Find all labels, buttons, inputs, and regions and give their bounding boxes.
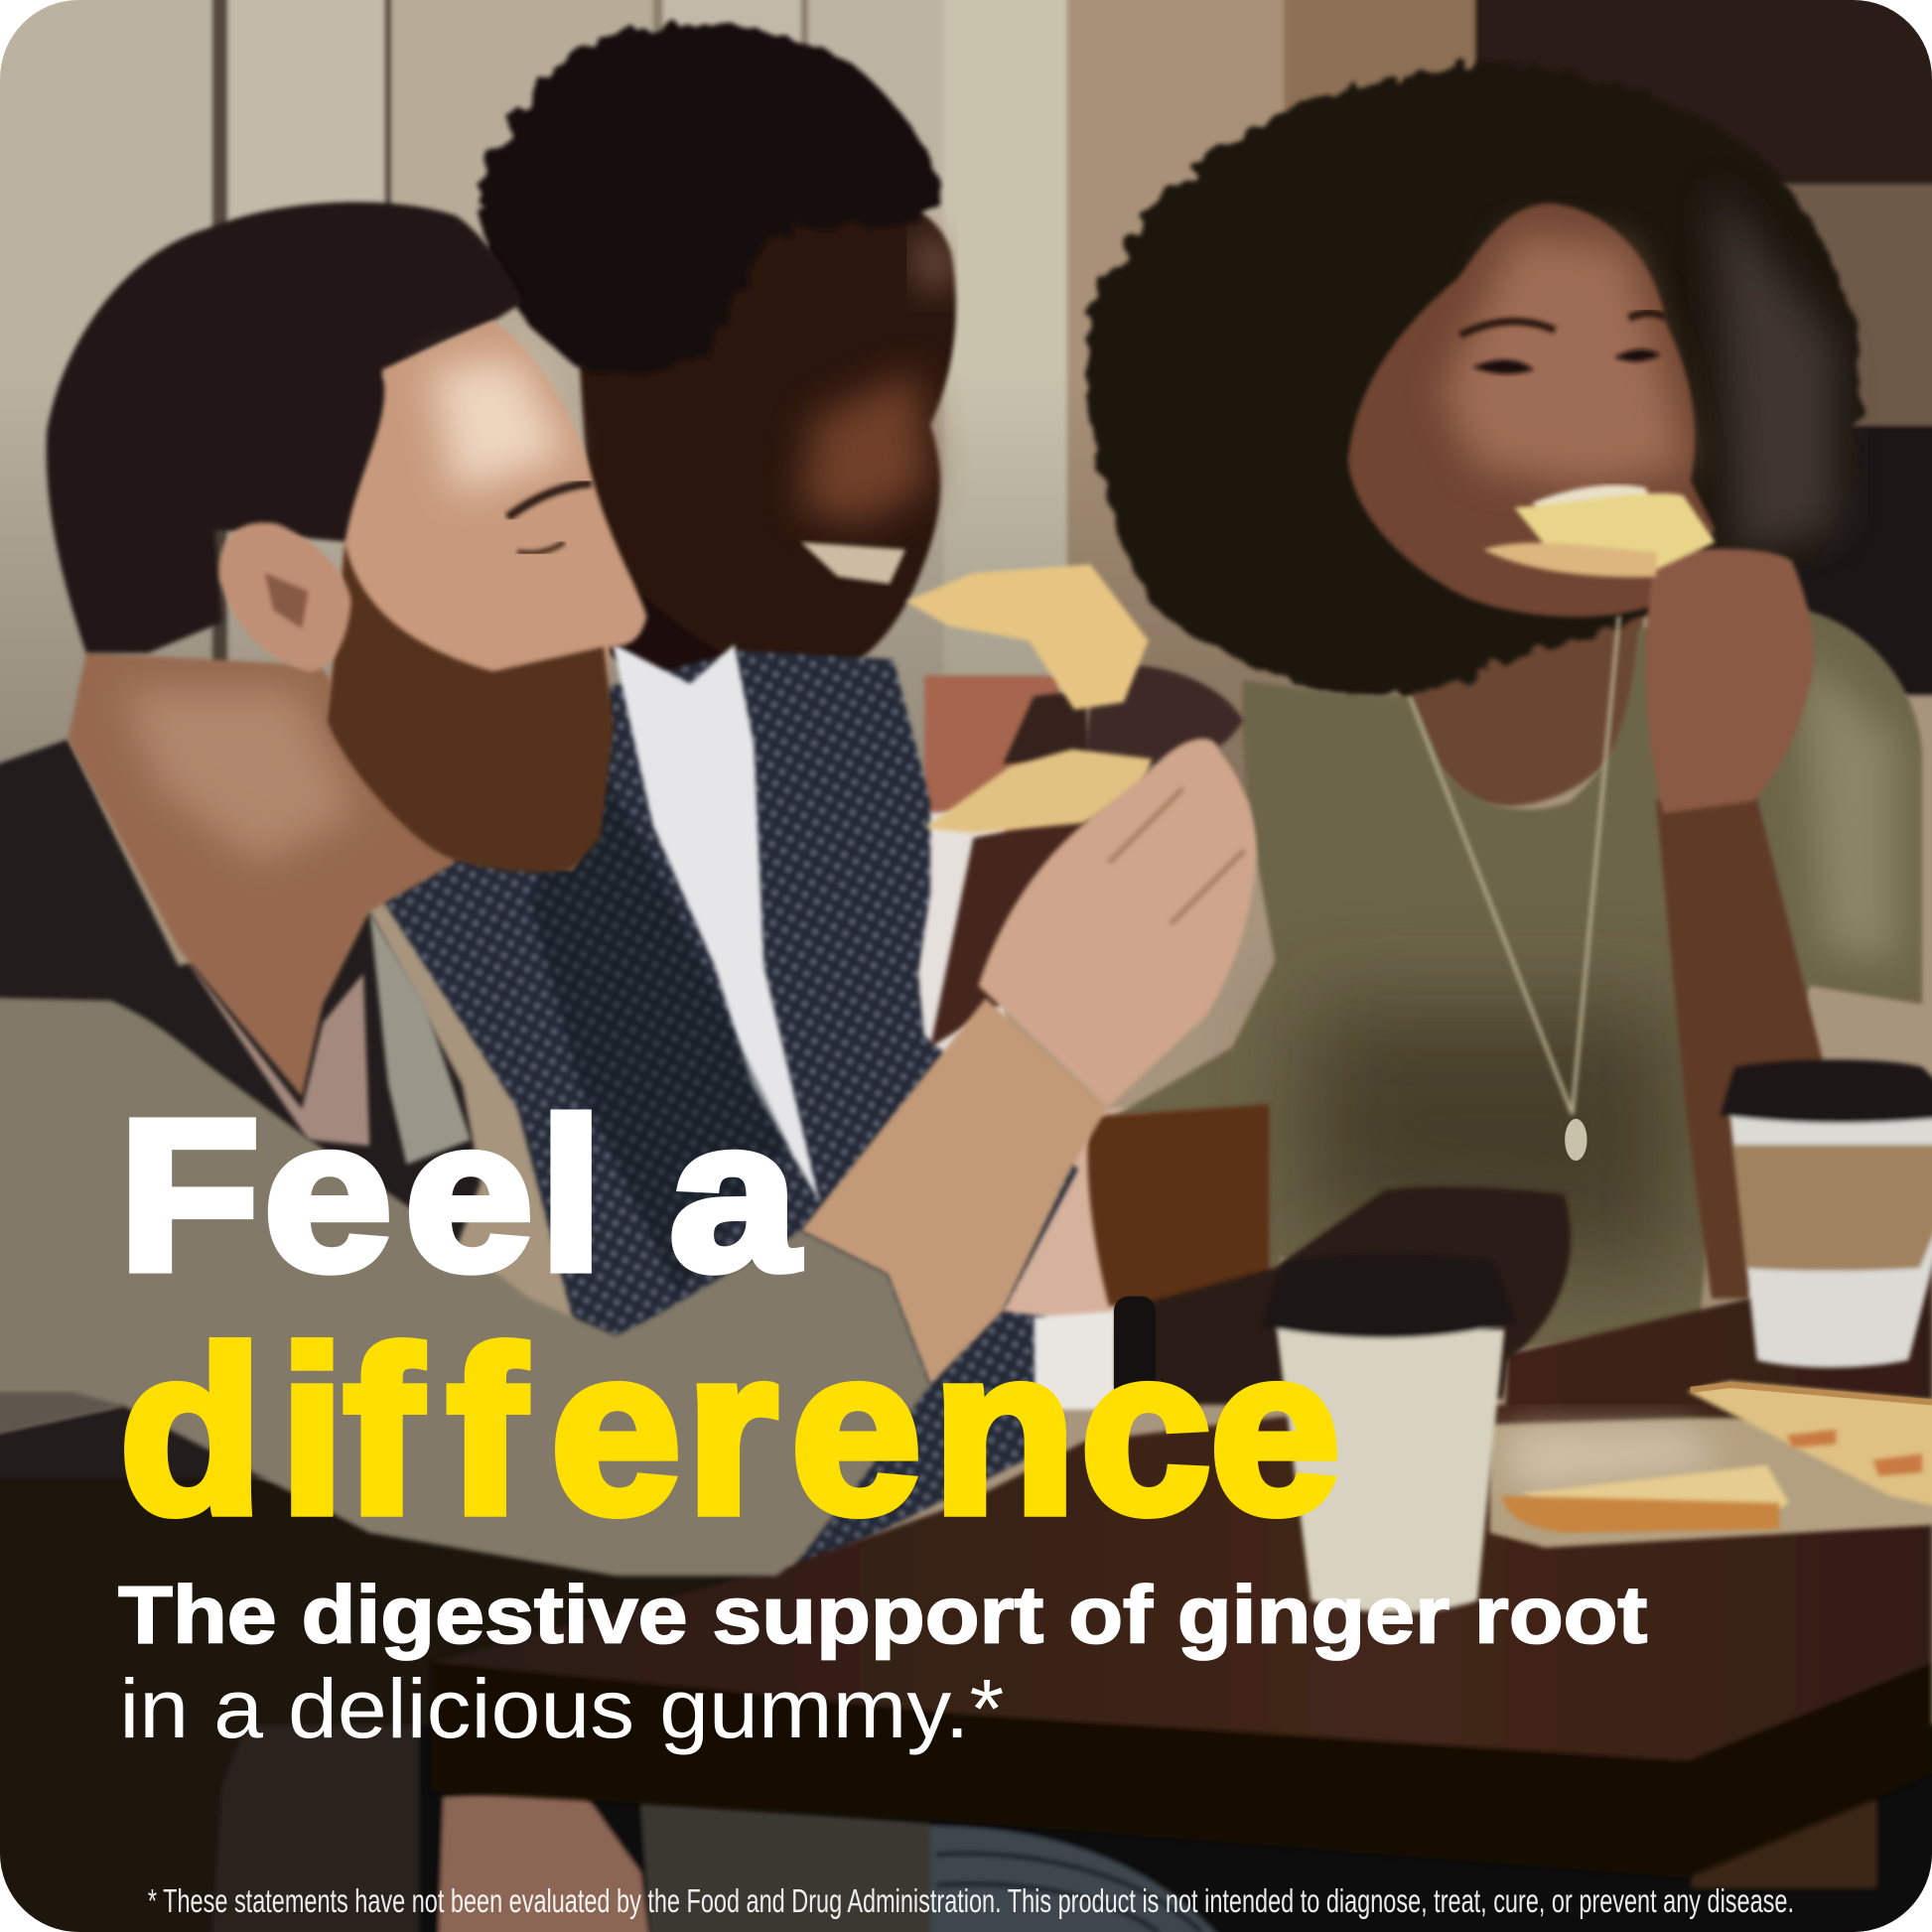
man's face (579, 195, 956, 684)
paper placemat (1489, 1417, 1932, 1548)
woman's face highlights (1442, 234, 1688, 486)
photo: centre man in navy jacket (382, 25, 1243, 1571)
finger creases (1109, 788, 1244, 924)
table top (431, 1243, 1932, 1760)
title line: Feel a: Feel a (118, 1075, 800, 1314)
jacket (0, 740, 481, 1478)
coffee cup, right (1721, 1059, 1932, 1368)
sleeve (0, 997, 930, 1576)
bracelet (1114, 1297, 1156, 1401)
woman's face (1348, 204, 1716, 617)
forearm (801, 998, 1108, 1385)
jacket right panel (369, 911, 471, 1165)
woman's pizza slice (1483, 493, 1716, 577)
photo: woman eating pizza (1087, 68, 1922, 1349)
hand under table (438, 1787, 653, 1932)
woman's raised arm and hand (1656, 788, 1823, 1299)
man's hair (478, 25, 942, 376)
woman's hair (1087, 68, 1863, 697)
shirt (613, 643, 819, 1201)
photo: under-table area (0, 1430, 1932, 1932)
light background behind jacket (918, 813, 1004, 1084)
photo: bearded man in foreground (0, 202, 1256, 1576)
subtitle regular line: in a delicious gummy.* (119, 1662, 1004, 1755)
man's raised arm (930, 813, 1090, 1047)
eyebrow (507, 483, 592, 517)
grey clothing (640, 1801, 930, 1932)
woman's teeth (1531, 483, 1650, 508)
woman's t-shirt (1114, 610, 1922, 1349)
dark lower background (0, 1430, 788, 1932)
ear (219, 522, 351, 671)
haze at knee (209, 1725, 425, 1932)
woman's eyes and brows (1460, 313, 1666, 374)
woman's necklace (1410, 617, 1619, 1114)
sleeve cuff band at left (0, 1392, 123, 1441)
hair (47, 202, 523, 653)
man's teeth (801, 542, 905, 584)
pizza toppings (1787, 1430, 1922, 1476)
photo: dark hand, cups and pizza (1034, 1059, 1932, 1612)
photo: table (431, 1243, 1932, 1877)
table leg (1692, 1799, 1876, 1887)
dark hand (1116, 1186, 1571, 1405)
man's neck (607, 583, 725, 673)
woman's lower arm (1087, 1104, 1269, 1307)
upper pizza slice (905, 564, 1149, 710)
face (327, 321, 647, 869)
dark area below table (419, 1725, 1932, 1932)
coffee cup, front (1262, 1255, 1514, 1612)
jacket (382, 650, 1078, 1571)
man's face highlights (801, 369, 930, 523)
pink background by elbow (1004, 1106, 1128, 1318)
subtitle bold line: The digestive support of ginger root (118, 1570, 1647, 1660)
woman's neck (1398, 614, 1646, 808)
pizza slice, lower (1522, 1465, 1789, 1509)
orange chair (924, 675, 1059, 835)
inner shirt (179, 949, 369, 1146)
t-shirt shading (1307, 1011, 1676, 1269)
title line: difference: difference (119, 1301, 1340, 1562)
jacket lapel shadow (530, 752, 788, 1294)
table front edge (431, 1662, 1932, 1877)
forehead highlight (431, 357, 567, 492)
neck (68, 653, 456, 1097)
eye (517, 542, 564, 553)
white cuff (1034, 1311, 1116, 1410)
pizza slice, upper (1687, 1381, 1932, 1514)
lower pizza slice (924, 750, 1152, 833)
striped clothing (930, 1826, 1247, 1932)
beard (327, 542, 614, 872)
man's hand (1084, 665, 1243, 766)
hand (978, 739, 1256, 1108)
